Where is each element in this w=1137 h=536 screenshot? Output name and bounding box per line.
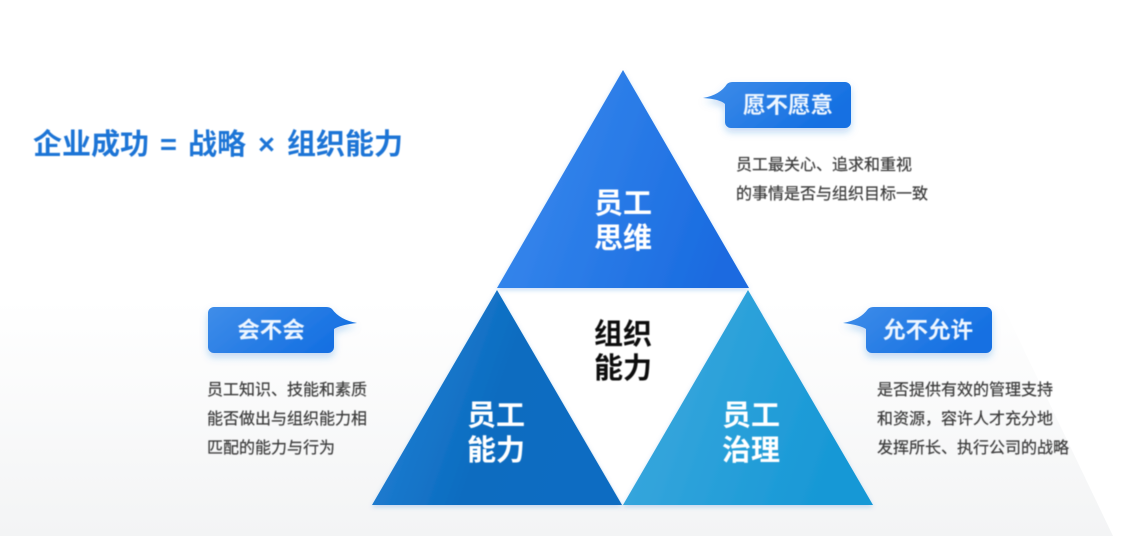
text block: 会不会 description: 员工知识、技能和素质 — [207, 381, 367, 399]
text block: 允不允许 description: 发挥所长、执行公司的战略 — [877, 439, 1069, 457]
panel: left triangle 员工能力 — [372, 290, 622, 505]
title: formula: 战略 — [188, 128, 246, 161]
panel: right triangle 员工治理 — [623, 290, 873, 505]
title: formula — [33, 128, 403, 161]
panel: top triangle 员工思维: 思维 — [594, 222, 652, 255]
text block: 愿不愿意 description: 的事情是否与组织目标一致 — [736, 185, 928, 203]
pyramid diagram — [372, 70, 873, 505]
panel: top triangle 员工思维 — [497, 70, 749, 288]
title: formula: × — [258, 129, 275, 161]
panel: right triangle 员工治理: 员工 — [722, 400, 780, 432]
callout: 会不会: 会不会 — [237, 318, 305, 343]
background diagonal panel — [0, 300, 1113, 536]
callout: 愿不愿意 — [703, 82, 851, 128]
text block: 愿不愿意 description: 员工最关心、追求和重视 — [736, 156, 912, 174]
text block: 允不允许 description: 是否提供有效的管理支持 — [877, 381, 1053, 399]
panel: right triangle 员工治理: 治理 — [722, 434, 780, 467]
text block: 愿不愿意 description — [736, 156, 928, 203]
panel: left triangle 员工能力: 能力 — [467, 434, 525, 467]
title: formula: 企业成功 — [33, 128, 149, 161]
panel: left triangle 员工能力: 员工 — [467, 400, 525, 432]
text block: 会不会 description — [207, 381, 367, 457]
text block: 允不允许 description — [877, 381, 1069, 457]
panel: top triangle 员工思维: 员工 — [594, 188, 652, 220]
text block: 会不会 description: 匹配的能力与行为 — [207, 439, 335, 457]
title: formula: = — [160, 129, 177, 161]
panel: center white triangle 组织能力: 组织 — [594, 318, 652, 351]
callout: 允不允许 — [843, 307, 992, 353]
panel: center white triangle 组织能力 — [497, 288, 749, 505]
callout: 允不允许: 允不允许 — [883, 317, 973, 343]
panel: center white triangle 组织能力: 能力 — [594, 352, 652, 385]
text block: 会不会 description: 能否做出与组织能力相 — [207, 410, 367, 428]
title: formula: 组织能力 — [287, 128, 403, 161]
callout: 会不会 — [208, 307, 357, 353]
text block: 允不允许 description: 和资源，容许人才充分地 — [877, 410, 1053, 428]
callout: 愿不愿意: 愿不愿意 — [743, 93, 833, 118]
